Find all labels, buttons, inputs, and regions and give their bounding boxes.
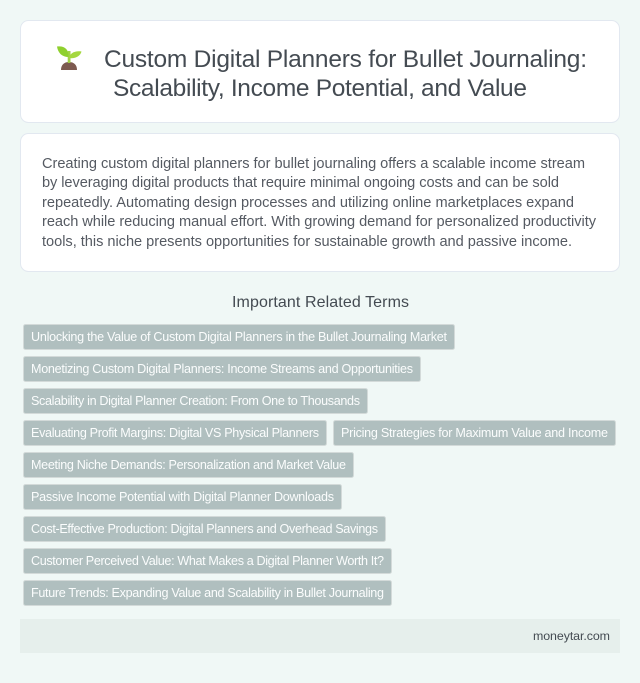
tag 4: Evaluating Profit Margins: Digital VS Physical Planners bbox=[31, 426, 319, 440]
tag 2: Monetizing Custom Digital Planners: Income Streams and Opportunities bbox=[31, 362, 413, 376]
tag 3: Scalability in Digital Planner Creation: From One to Thousands bbox=[31, 394, 360, 408]
title text: Custom Digital Planners for Bullet Journaling: bbox=[104, 46, 587, 73]
summary text: reach while reducing manual effort. With growing demand for personalized productivity bbox=[42, 214, 597, 230]
tag 3 bbox=[24, 388, 368, 414]
tag 10: Future Trends: Expanding Value and Scalability in Bullet Journaling bbox=[31, 586, 384, 600]
summary text: Creating custom digital planners for bullet journaling offers a scalable income stream bbox=[42, 156, 585, 172]
tag 8: Cost-Effective Production: Digital Planners and Overhead Savings bbox=[31, 522, 378, 536]
title text: Scalability, Income Potential, and Value bbox=[113, 75, 527, 102]
tag 6 bbox=[24, 452, 354, 478]
tag 1 bbox=[24, 324, 454, 350]
tag 5 bbox=[334, 420, 616, 446]
summary text: tools, this niche presents opportunities for sustainable growth and passive income. bbox=[42, 234, 572, 250]
footer bbox=[20, 619, 620, 653]
tag 4 bbox=[24, 420, 326, 446]
tag 9 bbox=[24, 548, 392, 574]
panel: title bbox=[20, 20, 620, 122]
summary text bbox=[42, 156, 597, 250]
icon: seedling bbox=[57, 46, 82, 70]
summary text: repeatedly. Automating design processes and utilizing online marketplaces expand bbox=[42, 195, 574, 211]
tag 5: Pricing Strategies for Maximum Value and Income bbox=[341, 426, 608, 440]
footer source text: moneytar.com bbox=[533, 629, 610, 643]
tag 1: Unlocking the Value of Custom Digital Planners in the Bullet Journaling Market bbox=[31, 330, 448, 344]
title text bbox=[104, 46, 587, 102]
panel: summary bbox=[20, 134, 620, 272]
tag list bbox=[24, 324, 616, 606]
tag 7: Passive Income Potential with Digital Planner Downloads bbox=[31, 490, 334, 504]
tag 8 bbox=[24, 516, 386, 542]
tag 10 bbox=[24, 580, 392, 606]
heading: related terms: Important Related Terms bbox=[232, 294, 409, 311]
summary text: by leveraging digital products that require minimal ongoing costs and can be sold bbox=[42, 175, 559, 191]
tag 2 bbox=[24, 356, 420, 382]
tag 6: Meeting Niche Demands: Personalization and Market Value bbox=[31, 458, 346, 472]
tag 9: Customer Perceived Value: What Makes a Digital Planner Worth It? bbox=[31, 554, 384, 568]
tag 7 bbox=[24, 484, 342, 510]
